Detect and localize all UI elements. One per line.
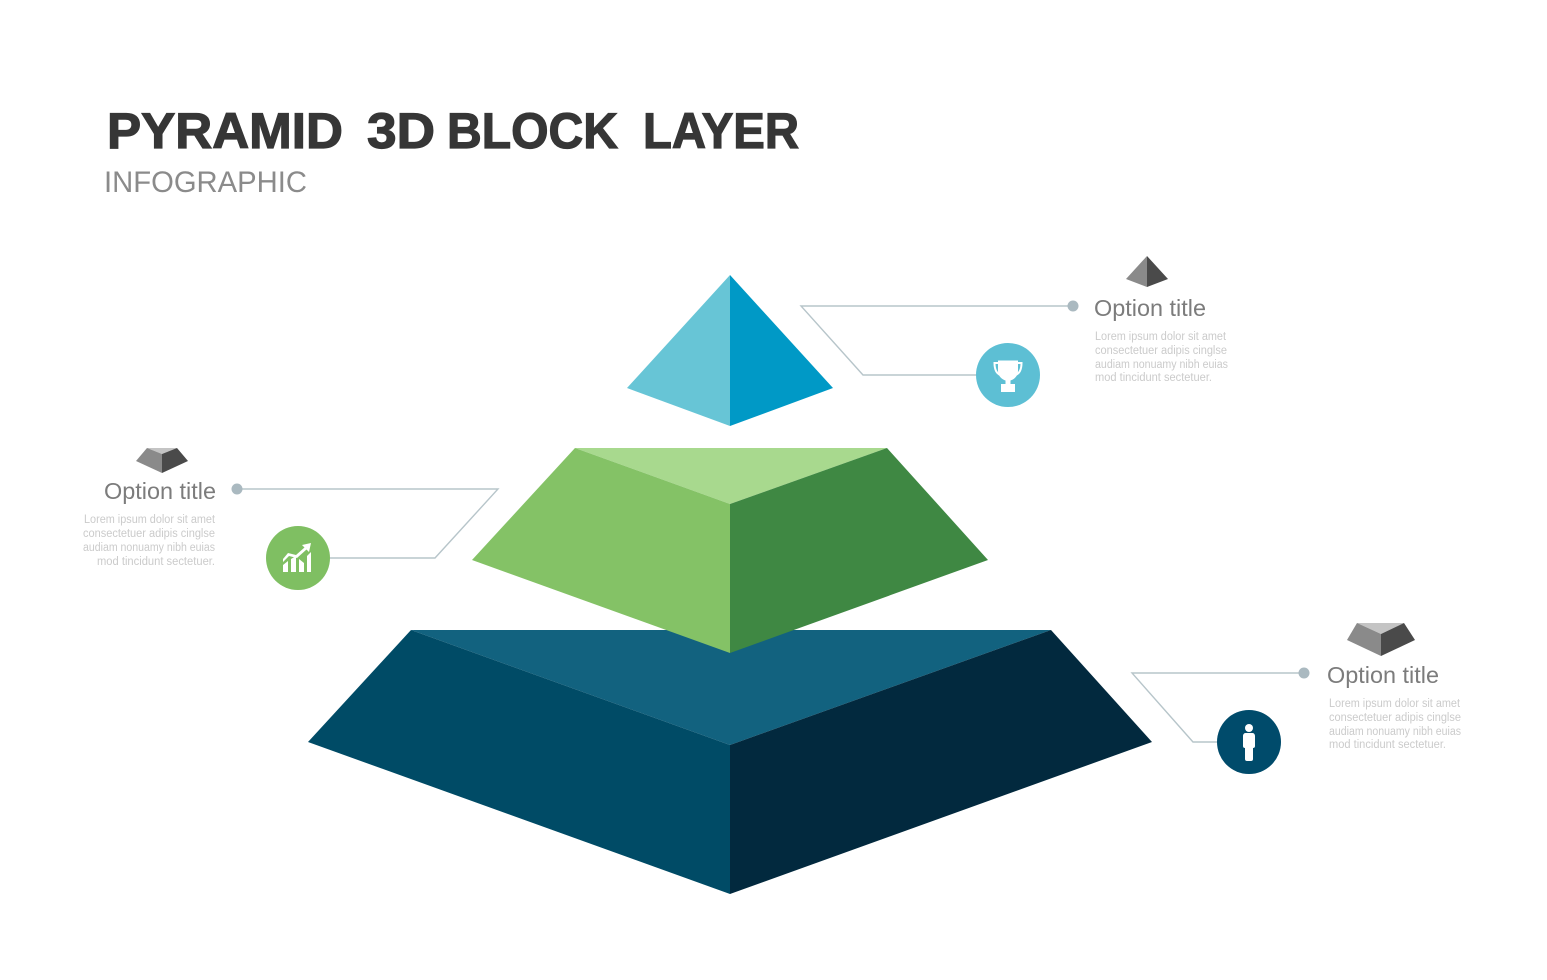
title: BLOCK xyxy=(447,103,618,159)
body text: top: Lorem ipsum dolor sit amet xyxy=(1095,331,1227,343)
body text: middle xyxy=(83,514,216,568)
body text: top xyxy=(1095,331,1228,384)
body text: top: mod tincidunt sectetuer. xyxy=(1095,372,1212,384)
connector lines: bottom layer xyxy=(1132,668,1310,742)
body text: middle: Lorem ipsum dolor sit amet xyxy=(84,514,216,526)
callout: middle layer xyxy=(83,448,498,590)
body text: bottom: mod tincidunt sectetuer. xyxy=(1329,739,1446,751)
title: 3D xyxy=(367,103,435,159)
body text: bottom: consectetuer adipis cinglse xyxy=(1329,712,1461,724)
body text: bottom: Lorem ipsum dolor sit amet xyxy=(1329,698,1461,710)
icon: mini green block xyxy=(136,448,188,473)
pyramid middle layer: green block xyxy=(472,448,988,653)
callout: bottom layer xyxy=(1132,623,1461,774)
callout: top layer xyxy=(801,256,1228,407)
body text: middle: consectetuer adipis cinglse xyxy=(83,528,215,540)
pyramid bottom layer: navy block xyxy=(308,630,1152,894)
connector lines: middle layer xyxy=(232,484,498,558)
body text: top: consectetuer adipis cinglse xyxy=(1095,345,1227,357)
title: LAYER xyxy=(643,103,799,159)
body text: top: audiam nonuamy nibh euias xyxy=(1095,359,1228,371)
option title: top: Option title xyxy=(1094,295,1206,321)
title xyxy=(107,103,799,159)
pyramid top layer: blue cap xyxy=(627,275,833,426)
body text: bottom xyxy=(1329,698,1461,751)
body text: middle: mod tincidunt sectetuer. xyxy=(97,556,215,568)
icon: trophy xyxy=(976,343,1040,407)
body text: bottom: audiam nonuamy nibh euias xyxy=(1329,726,1461,738)
body text: middle: audiam nonuamy nibh euias xyxy=(83,542,215,554)
icon: mini pyramid cap xyxy=(1126,256,1168,287)
icon: person xyxy=(1217,710,1281,774)
connector lines: top layer xyxy=(801,300,1078,375)
icon: mini navy block xyxy=(1347,623,1415,656)
subtitle: INFOGRAPHIC xyxy=(104,166,307,199)
option title: middle: Option title xyxy=(104,478,216,504)
option title: bottom: Option title xyxy=(1327,662,1439,688)
title: PYRAMID xyxy=(107,103,343,159)
icon: growth chart xyxy=(266,526,330,590)
